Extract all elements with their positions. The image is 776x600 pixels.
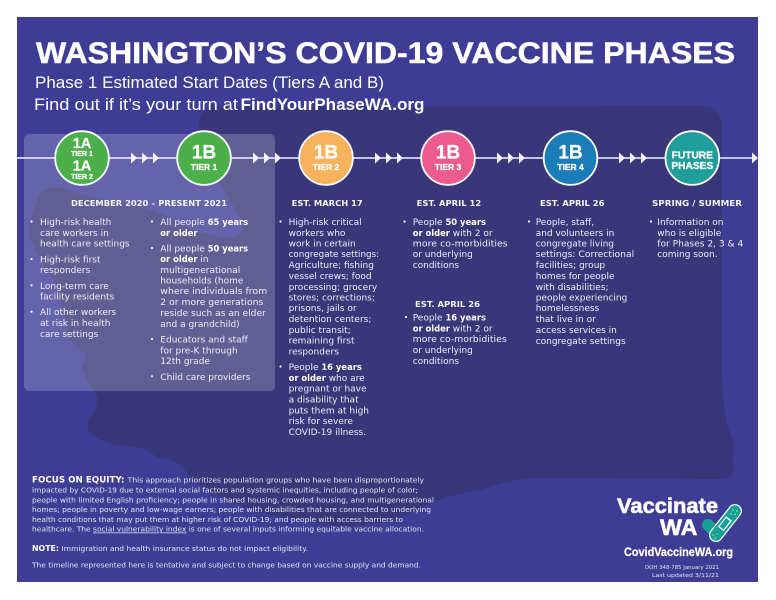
list: 1B tier 2 eligibility: High-risk critical xyxy=(289,218,362,228)
badge: 1B tier 4: TIER 4 xyxy=(557,162,584,172)
note on eligibility: NOTE: xyxy=(32,544,59,553)
list: 1B tier 2 eligibility: People 16 years xyxy=(289,362,362,373)
badge: 1B tier 3 xyxy=(421,131,475,185)
badge: 1A tier 1 and tier 2: TIER 1 xyxy=(71,151,93,158)
list: 1B tier 2 eligibility: work in certain xyxy=(289,240,356,250)
list: future phases xyxy=(650,218,744,260)
Vaccinate WA logo xyxy=(617,495,737,540)
list: 1A eligibility: High-risk health xyxy=(40,218,111,228)
focus on equity text block: people with limited English proficiency; people in shared housing, crowded housing, and multigenerational xyxy=(32,496,434,504)
list: 1B tier 2 eligibility: workers who xyxy=(289,229,346,239)
list: 1B tier 4 eligibility: with disabilities; xyxy=(536,283,609,293)
list: future phases: who is eligible xyxy=(657,229,722,239)
document number: DOH 348-785 January 2021 xyxy=(645,565,719,571)
timeline disclaimer: The timeline represented here is tentative and subject to change based on vaccine supply and demand. xyxy=(31,560,421,570)
list: 1B tier 2 eligibility: processing; grocery xyxy=(289,283,378,293)
badge: 1B tier 4: 1B xyxy=(558,143,583,164)
subtitle link line: Find out if it’s your turn at xyxy=(34,95,238,114)
list: 1B tier 4 eligibility: facilities; group xyxy=(536,261,605,271)
list: 1B tier 2 eligibility xyxy=(279,218,379,438)
list: 1A eligibility: responders xyxy=(40,266,91,276)
Vaccinate WA logo: Vaccinate xyxy=(617,495,718,518)
list: 1B tier 3 eligibility, April 26: or underlying xyxy=(413,346,473,356)
badge: 1B tier 1: TIER 1 xyxy=(191,162,217,172)
list: 1B tier 1 eligibility: reside such as an elder xyxy=(160,309,266,319)
list: 1B tier 2 eligibility: puts them at high xyxy=(289,406,369,416)
date heading: April 26: EST. APRIL 26 xyxy=(540,198,605,208)
list: 1B tier 1 eligibility: 2 or more generations xyxy=(160,298,264,308)
list: 1B tier 2 eligibility: responders xyxy=(289,348,339,358)
Vaccinate WA logo: WA xyxy=(660,515,698,540)
badge: future phases: FUTURE xyxy=(672,150,713,161)
badge: 1B tier 4 xyxy=(544,131,597,185)
list: 1B tier 2 eligibility: stores; corrections; xyxy=(289,294,375,304)
list: 1B tier 4 eligibility: congregate settings xyxy=(536,337,626,347)
list: 1B tier 2 eligibility: congregate settings: xyxy=(289,250,379,260)
list: 1B tier 1 eligibility: 12th grade xyxy=(160,357,210,367)
list: 1A eligibility: care workers in xyxy=(40,229,109,239)
list: future phases: for Phases 2, 3 & 4 xyxy=(657,240,744,250)
list: 1B tier 4 eligibility: People, staff, xyxy=(536,218,594,228)
list: 1B tier 3 eligibility, April 12: or older with 2 or xyxy=(413,228,493,239)
badge: 1B tier 1: 1B xyxy=(192,143,216,164)
title: WASHINGTON’S COVID-19 VACCINE PHASES xyxy=(36,37,735,70)
focus on equity text block xyxy=(32,476,434,534)
badge: 1A tier 1 and tier 2: 1A xyxy=(73,159,92,175)
badge: 1B tier 2: 1B xyxy=(314,143,338,164)
list: 1A eligibility: High-risk first xyxy=(40,256,101,266)
list: 1B tier 1 eligibility: or older in xyxy=(160,254,209,265)
list: 1B tier 1 eligibility: where individuals from xyxy=(160,287,267,297)
badge: 1B tier 3: 1B xyxy=(436,143,460,164)
list: 1A eligibility: at risk in health xyxy=(40,319,110,329)
highlighted panel: current phases xyxy=(24,134,275,391)
focus on equity text block: FOCUS ON EQUITY: xyxy=(32,476,125,486)
list: 1B tier 1 eligibility: All people 65 years xyxy=(160,217,248,228)
list: 1B tier 4 eligibility: that live in or xyxy=(536,315,596,325)
list: 1B tier 1 eligibility: households (home xyxy=(160,276,244,286)
badge: 1A tier 1 and tier 2: TIER 2 xyxy=(71,174,93,181)
date heading: April 12: EST. APRIL 12 xyxy=(417,198,481,208)
list: 1B tier 3 eligibility, April 26: more co-morbidities xyxy=(413,335,507,345)
list: 1B tier 2 eligibility: remaining first xyxy=(289,336,355,346)
note on eligibility: Immigration and health insurance status do not impact eligibility. xyxy=(62,544,308,553)
list: 1B tier 3 eligibility, April 12: or underlying xyxy=(413,250,473,260)
Washington state silhouette xyxy=(29,106,734,526)
list: 1B tier 2 eligibility: COVID-19 illness. xyxy=(289,428,366,438)
badge: 1B tier 2 xyxy=(299,131,353,185)
list: 1B tier 1 eligibility: and a grandchild) xyxy=(160,320,240,330)
list: 1A eligibility: All other workers xyxy=(40,308,117,318)
focus on equity text block: impacted by COVID-19 due to external social factors and systemic inequities, including people of color; xyxy=(32,486,418,494)
list: 1B tier 2 eligibility: a disability that xyxy=(289,396,359,406)
list: 1A eligibility: care settings xyxy=(40,330,99,340)
list: 1B tier 4 eligibility: homelessness xyxy=(536,304,600,314)
focus on equity text block: healthcare. The social vulnerability index is one of several inputs informing equitable vaccine allocation. xyxy=(32,524,424,534)
last updated date: Last updated 3/11/21 xyxy=(652,573,719,579)
list: 1A eligibility: facility residents xyxy=(40,292,115,302)
list: 1B tier 1 eligibility xyxy=(151,217,267,383)
list: 1B tier 4 eligibility: settings: Correctional xyxy=(536,250,634,260)
list: 1B tier 4 eligibility: homes for people xyxy=(536,272,615,282)
list: 1A eligibility xyxy=(30,218,130,340)
list: 1B tier 2 eligibility: detention centers; xyxy=(289,315,371,325)
badge: 1B tier 3: TIER 3 xyxy=(435,162,461,172)
list: 1B tier 4 eligibility: congregate living xyxy=(536,240,614,250)
focus on equity text block: This approach prioritizes population groups who have been disproportionately xyxy=(127,476,425,484)
list: future phases: coming soon. xyxy=(657,250,718,260)
date heading: December 2020 to present: DECEMBER 2020 – PRESENT 2021 xyxy=(71,198,227,208)
list: 1B tier 3 eligibility, April 26: or older with 2 or xyxy=(413,324,493,334)
list: 1B tier 3 eligibility, April 12: People 50 years xyxy=(413,217,486,228)
list: 1B tier 4 eligibility xyxy=(528,218,634,347)
list: 1A eligibility: health care settings xyxy=(40,240,130,250)
date heading: second April 26: EST. APRIL 26 xyxy=(415,299,480,309)
subtitle: Phase 1 Estimated Start Dates (Tiers A and B) xyxy=(35,74,384,92)
list: future phases: Information on xyxy=(657,218,723,228)
list: 1B tier 3 eligibility, April 12: more co-morbidities xyxy=(413,240,508,250)
subtitle link line xyxy=(34,95,424,114)
list: 1A eligibility: Long-term care xyxy=(40,282,109,292)
website URL: CovidVaccineWA.org xyxy=(624,547,733,559)
list: 1B tier 3 eligibility, April 12: conditions xyxy=(413,261,459,271)
badge: 1B tier 2: TIER 2 xyxy=(313,162,339,172)
list: 1B tier 2 eligibility: vessel crews; food xyxy=(289,272,372,282)
list: 1B tier 3 eligibility, April 26: conditions xyxy=(413,357,459,367)
focus on equity text block: homes; people in poverty and low-wage earners; people with disabilities that are connected to underlying xyxy=(32,505,431,514)
list: 1B tier 2 eligibility: prisons, jails or xyxy=(289,304,357,314)
date heading: spring and summer: SPRING / SUMMER xyxy=(652,198,743,208)
list: 1B tier 2 eligibility: or older who are xyxy=(289,373,365,384)
badge: future phases xyxy=(666,131,719,185)
list: 1B tier 3 eligibility, April 12 xyxy=(403,217,508,271)
date heading: March 17: EST. MARCH 17 xyxy=(292,198,363,208)
list: 1B tier 1 eligibility: multigenerational xyxy=(160,266,240,276)
subtitle link line: FindYourPhaseWA.org xyxy=(240,95,424,114)
badge: 1A tier 1 and tier 2: 1A xyxy=(73,136,92,152)
list: 1B tier 2 eligibility: pregnant or have xyxy=(289,384,367,394)
badge: future phases: PHASES xyxy=(671,161,713,172)
badge: 1B tier 1 xyxy=(177,131,231,185)
list: 1B tier 4 eligibility: access services in xyxy=(536,326,617,336)
list: 1B tier 3 eligibility, April 26: People 16 years xyxy=(413,312,486,324)
list: 1B tier 1 eligibility: All people 50 years xyxy=(160,244,248,254)
timeline with arrows xyxy=(17,152,758,164)
icon: bandage check mark xyxy=(708,510,737,538)
list: 1B tier 1 eligibility: Educators and staff xyxy=(160,336,249,346)
list: 1B tier 2 eligibility: Agriculture; fishing xyxy=(289,261,374,271)
list: 1B tier 1 eligibility: or older xyxy=(160,228,198,238)
list: 1B tier 4 eligibility: people experiencing xyxy=(536,294,627,304)
list: 1B tier 4 eligibility: and volunteers in xyxy=(536,229,614,239)
focus on equity text block: health conditions that may put them at higher risk of COVID-19; and people with access barriers to xyxy=(32,515,404,524)
list: 1B tier 1 eligibility: for pre-K through xyxy=(160,346,238,356)
list: 1B tier 2 eligibility: public transit; xyxy=(289,326,351,336)
list: 1B tier 2 eligibility: risk for severe xyxy=(289,417,353,427)
list: 1B tier 1 eligibility: Child care providers xyxy=(160,373,251,383)
list: 1B tier 3 eligibility, April 26 xyxy=(405,312,507,367)
badge: 1A tier 1 and tier 2 xyxy=(55,131,109,185)
